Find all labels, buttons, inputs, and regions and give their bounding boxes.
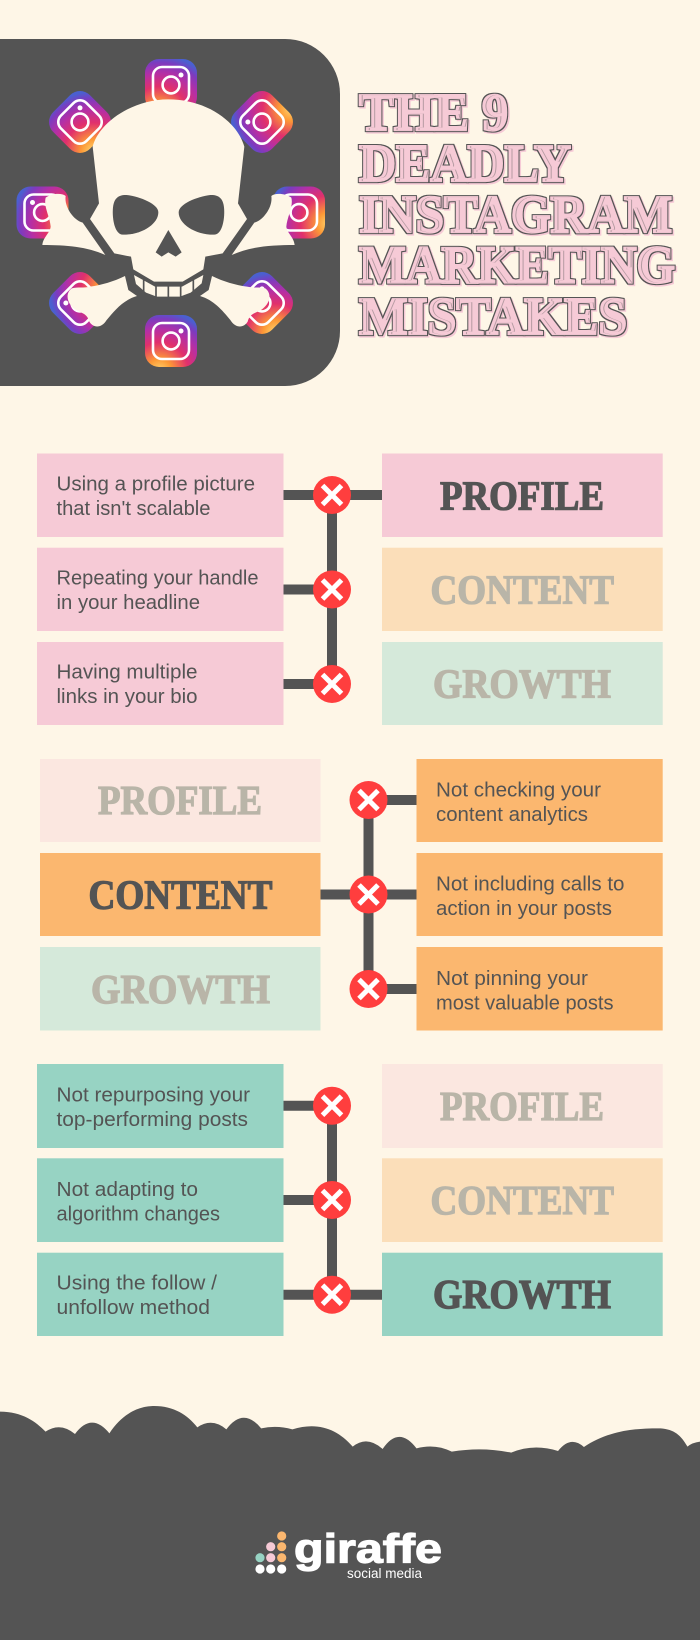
title: DEADLY	[359, 135, 571, 193]
icon: Instagram bottom-left	[43, 266, 117, 340]
icon: Instagram bottom	[145, 315, 197, 367]
box: mistake 1: Using a profile picture	[56, 474, 255, 496]
box: mistake 3: links in your bio	[56, 686, 197, 708]
box: mistake 2: in your headline	[56, 592, 200, 614]
title: MISTAKES	[359, 288, 627, 346]
tab: GROWTH faded: GROWTH	[433, 660, 611, 706]
tab: CONTENT faded: CONTENT	[430, 566, 614, 612]
title: THE 9	[359, 84, 508, 142]
panel: growth mistakes	[37, 1064, 663, 1336]
logo tagline: social media	[347, 1566, 422, 1581]
icon: Instagram bottom-right	[225, 266, 299, 340]
box: mistake 5: Not including calls to	[436, 874, 624, 896]
box: mistake 8: algorithm changes	[56, 1204, 220, 1226]
tab: CONTENT active: CONTENT	[88, 872, 272, 918]
title: MARKETING	[359, 236, 675, 294]
icon: Instagram top-left	[43, 85, 117, 159]
box: mistake 1	[37, 454, 284, 537]
connector lines	[284, 1106, 382, 1295]
icon: Instagram top	[145, 59, 197, 111]
box: mistake 5	[416, 853, 663, 936]
dark rounded panel	[0, 39, 340, 386]
icon: Instagram top-right	[225, 85, 299, 159]
tab: PROFILE faded	[382, 1064, 663, 1148]
tab: GROWTH active: GROWTH	[433, 1271, 611, 1317]
icon: red x 1	[313, 476, 351, 514]
icon: Instagram right	[273, 186, 325, 238]
icon: red x 5	[350, 876, 388, 914]
icon: red x 3	[313, 665, 351, 703]
box: mistake 4	[416, 759, 663, 842]
box: mistake 9: unfollow method	[56, 1297, 210, 1319]
connector lines	[284, 495, 382, 684]
box: mistake 3: Having multiple	[56, 662, 198, 684]
tab: CONTENT faded	[382, 548, 663, 631]
tab: PROFILE faded	[40, 759, 320, 842]
box: mistake 6: Not pinning your	[436, 968, 588, 990]
box: mistake 2: Repeating your handle	[56, 568, 258, 590]
box: mistake 7: Not repurposing your	[56, 1084, 250, 1106]
logo wordmark: giraffe	[294, 1526, 442, 1572]
box: mistake 7: top-performing posts	[56, 1109, 248, 1131]
box: mistake 3	[37, 642, 284, 725]
connector lines	[320, 800, 416, 989]
tab: GROWTH faded: GROWTH	[91, 966, 270, 1012]
logo: giraffe social media	[255, 1526, 442, 1581]
icon: red x 9	[313, 1276, 351, 1314]
tab: PROFILE faded: PROFILE	[98, 777, 262, 823]
box: mistake 6: most valuable posts	[436, 992, 614, 1014]
icon: red x 4	[350, 781, 388, 819]
header panel: skull and Instagram icons	[0, 39, 340, 386]
box: mistake 2	[37, 548, 284, 631]
icon: logo dots	[255, 1531, 286, 1574]
panel: content mistakes	[40, 759, 663, 1030]
tab: CONTENT faded: CONTENT	[430, 1177, 614, 1223]
tab: GROWTH active	[382, 1253, 663, 1336]
icon: red x 2	[313, 570, 351, 608]
icon: red x 7	[313, 1087, 351, 1125]
box: mistake 1: that isn't scalable	[56, 498, 210, 520]
icon: red x 6	[350, 970, 388, 1008]
title: INSTAGRAM	[359, 186, 672, 244]
box: mistake 8: Not adapting to	[56, 1179, 198, 1201]
box: mistake 7	[37, 1064, 284, 1148]
tab: PROFILE active	[382, 454, 663, 537]
tab: PROFILE active: PROFILE	[440, 472, 604, 518]
box: mistake 5: action in your posts	[436, 898, 612, 920]
tab: GROWTH faded	[382, 642, 663, 725]
panel: profile mistakes	[37, 454, 663, 725]
tab: CONTENT active	[40, 853, 320, 936]
title	[359, 84, 675, 346]
tab: CONTENT faded	[382, 1158, 663, 1242]
tab: GROWTH faded	[40, 947, 320, 1030]
icon: Instagram left	[16, 186, 68, 238]
tab: PROFILE faded: PROFILE	[440, 1083, 604, 1129]
box: mistake 9: Using the follow /	[56, 1272, 217, 1294]
box: mistake 9	[37, 1253, 284, 1336]
icon: skull and crossbones	[42, 99, 295, 326]
footer: dark hill band	[0, 1406, 700, 1640]
box: mistake 6	[416, 947, 663, 1030]
icon: red x 8	[313, 1181, 351, 1219]
box: mistake 4: content analytics	[436, 804, 588, 826]
box: mistake 8	[37, 1158, 284, 1242]
box: mistake 4: Not checking your	[436, 780, 601, 802]
